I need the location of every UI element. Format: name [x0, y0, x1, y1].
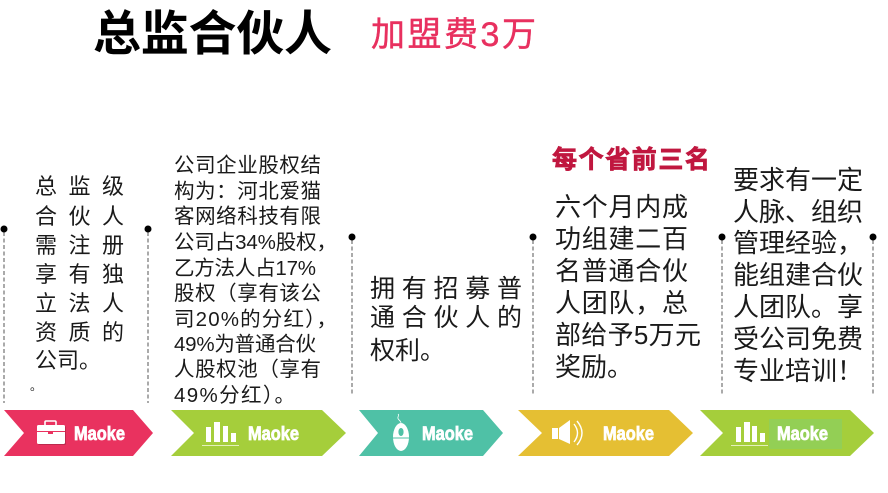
text block 2: 客网络科技有限 [174, 205, 321, 228]
arrow 5: bar chart [700, 410, 874, 456]
icon: speaker [552, 420, 582, 445]
arrow 1: briefcase: Maoke [74, 424, 125, 445]
text block 4 [555, 192, 701, 382]
text block 1: 需 注 册 [35, 233, 124, 258]
text block 4: 部给予5万元 [555, 320, 701, 350]
subtitle: franchise fee: 加盟费3万 [371, 16, 536, 54]
icon: bar chart [731, 422, 768, 446]
timeline marker 4 [530, 234, 536, 396]
text block 3: 拥有招募普 [370, 275, 522, 303]
icon: mouse [393, 414, 409, 451]
arrow 1: briefcase [4, 410, 153, 456]
text block 2 [174, 154, 337, 407]
text block 4: 功组建二百 [555, 224, 688, 254]
arrow 5: bar chart: Maoke [777, 424, 828, 445]
text block 1: 总 监 级 [35, 174, 124, 199]
text block 2: 公司占34%股权， [174, 231, 337, 254]
text block 3: 权利。 [370, 337, 445, 365]
text block 5: 要求有一定 [733, 165, 863, 195]
text block 1: 。 [30, 379, 42, 393]
callout: top three per province: 每个省前三名 [552, 146, 710, 174]
arrow 2: bar chart: Maoke [248, 424, 299, 445]
arrow 4: speaker: Maoke [603, 424, 654, 445]
text block 2: 股权（享有该公 [174, 282, 321, 305]
text block 5 [733, 165, 863, 386]
text block 2: 司20%的分红）， [174, 308, 337, 331]
text block 4: 人团队，总 [555, 288, 688, 318]
text block 1: 合 伙 人 [35, 204, 124, 229]
text block 4: 奖励。 [555, 352, 633, 382]
text block 2: 公司企业股权结 [174, 154, 321, 177]
title: 总监合伙人 [93, 8, 332, 61]
timeline marker 6 [870, 234, 876, 396]
text block 3 [370, 275, 522, 365]
text block 2: 49%为普通合伙 [174, 333, 316, 356]
text block 4: 名普通合伙 [555, 256, 688, 286]
text block 2: 乙方法人占17% [174, 257, 316, 280]
text block 3: 通合伙人的 [370, 304, 522, 332]
text block 1: 享 有 独 [35, 262, 124, 287]
text block 2: 构为：河北爱猫 [174, 180, 321, 203]
text block 2: 人股权池（享有 [174, 358, 321, 381]
arrow 3: mouse [359, 410, 503, 456]
timeline marker 1 [0, 226, 8, 403]
arrow 4: speaker [518, 410, 693, 456]
text block 5: 专业培训！ [733, 356, 863, 386]
text block 1 [30, 174, 124, 393]
icon: briefcase [37, 421, 66, 445]
text block 5: 管理经验， [733, 228, 863, 258]
text block 5: 人团队。享 [733, 292, 863, 322]
text block 1: 立 法 人 [35, 291, 124, 316]
text block 5: 受公司免费 [733, 324, 863, 354]
text block 5: 能组建合伙 [733, 260, 863, 290]
icon: bar chart [202, 422, 239, 446]
text block 5: 人脉、组织 [733, 197, 863, 227]
text block 1: 资 质 的 [35, 320, 124, 345]
timeline marker 3 [348, 234, 356, 396]
text block 4: 六个月内成 [555, 192, 688, 222]
text block 2: 49%分红）。 [174, 384, 295, 407]
arrow 3: mouse: Maoke [422, 424, 473, 445]
text block 1: 公司。 [35, 348, 101, 373]
timeline marker 5 [718, 234, 726, 396]
timeline marker 2 [144, 226, 152, 403]
arrow 2: bar chart [171, 410, 346, 456]
